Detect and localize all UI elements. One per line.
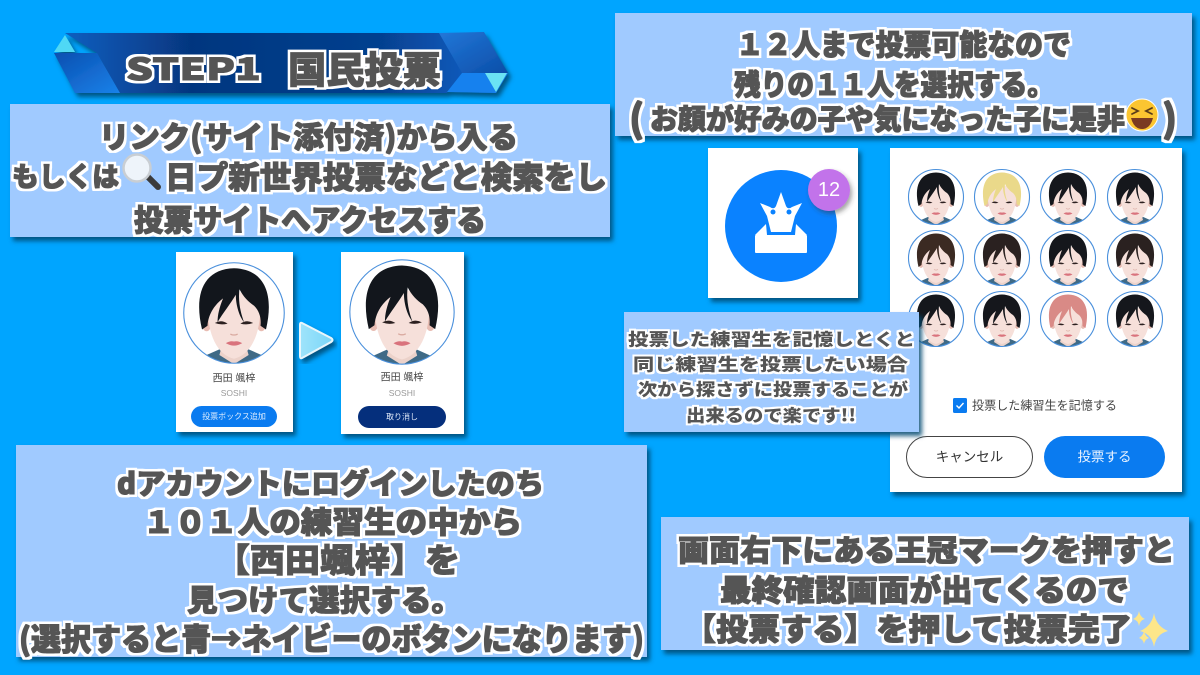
icon: laughing emoji [1126, 99, 1158, 131]
portrait: before [183, 262, 285, 368]
portrait 12 [1107, 291, 1163, 349]
portrait 4 [1107, 169, 1163, 227]
text: search line end: 日プ新世界投票などと検索をし [165, 152, 607, 198]
button: vote [1044, 436, 1165, 478]
icon: crown ballot box [725, 170, 837, 282]
name: 西田 颯梓 [381, 370, 423, 384]
text: button colour note: (選択すると青→ネイビーのボタンになります) [19, 614, 644, 660]
button: cancel selection [358, 406, 446, 428]
badge: 12: 12 [818, 179, 840, 201]
text: d account login: dアカウントにログインしたのち [117, 461, 544, 503]
text: link line: リンク(サイト添付済)から入る [99, 113, 518, 157]
arrow: before to after [300, 323, 332, 358]
name: 西田 颯梓 [213, 372, 255, 384]
portrait 9 [908, 291, 964, 349]
text: trainee name: 【西田颯梓】を [215, 534, 460, 582]
icon: magnifying glass [124, 154, 158, 187]
text: line 1: 投票した練習生を記憶しとくと [628, 326, 915, 350]
card: before selection [176, 252, 293, 432]
portrait 3 [1040, 169, 1096, 227]
card: after selection [341, 252, 464, 434]
text: line 3: 次から探さずに投票することが [638, 376, 908, 400]
text: line 2: 同じ練習生を投票したい場合 [633, 350, 908, 376]
portrait 6 [974, 230, 1030, 288]
romanized name: SOSHI [389, 388, 415, 398]
portrait 8 [1107, 230, 1163, 288]
checkbox: remember votes: 投票した練習生を記憶する [972, 398, 1117, 412]
text: line 4: 出来るので楽です!! [686, 402, 856, 426]
panel: up to 12 votes [615, 13, 1192, 144]
text: find and select: 見つけて選択する。 [187, 576, 462, 620]
portrait 11 [1040, 291, 1096, 349]
portrait 1 [908, 169, 964, 227]
portrait 5 [908, 230, 964, 288]
panel: complete the vote [661, 517, 1189, 650]
button: add to ballot box: 投票ボックス追加 [202, 411, 266, 421]
portrait 10 [974, 291, 1030, 349]
card: crown icon [708, 148, 858, 298]
portrait 2 [974, 169, 1030, 227]
portrait grid [908, 169, 1163, 349]
text: opening bracket: ( [629, 88, 644, 144]
panel: log in and choose [16, 445, 647, 660]
text: from 101 trainees: １０１人の練習生の中から [143, 498, 522, 542]
text: press vote: 【投票する】を押して投票完了 [684, 604, 1132, 650]
romanized name: SOSHI [221, 388, 247, 398]
icon: sparkles [1133, 611, 1168, 647]
button: cancel: キャンセル [936, 450, 1003, 464]
card: final confirmation [890, 148, 1182, 492]
button: vote: 投票する [1078, 450, 1132, 464]
text: select remaining 11: 残りの１１人を選択する。 [734, 62, 1054, 104]
button: cancel selection: 取り消し [386, 412, 418, 422]
text: access line: 投票サイトへアクセスする [134, 196, 486, 240]
panel: access the voting site [10, 104, 610, 240]
text: crown mark instruction: 画面右下にある王冠マークを押すと [678, 526, 1175, 570]
badge: 12 [808, 169, 850, 211]
portrait: after [349, 259, 455, 369]
banner title: 国民投票 [288, 40, 441, 94]
text: closing bracket: ) [1162, 88, 1177, 144]
portrait 7 [1040, 230, 1096, 288]
banner step label: STEP1 [126, 45, 261, 89]
text: recommendation: お顔が好みの子や気になった子に是非 [650, 98, 1125, 138]
button: cancel [906, 436, 1032, 478]
text: 12 votes possible: １２人まで投票可能なので [736, 22, 1071, 64]
text: final confirmation: 最終確認画面が出てくるので [720, 566, 1129, 610]
banner: STEP1 国民投票 [54, 32, 508, 94]
panel: remember voted trainees [624, 312, 919, 432]
text: search line start: もしくは [12, 156, 119, 194]
button: add to ballot box [191, 406, 277, 427]
